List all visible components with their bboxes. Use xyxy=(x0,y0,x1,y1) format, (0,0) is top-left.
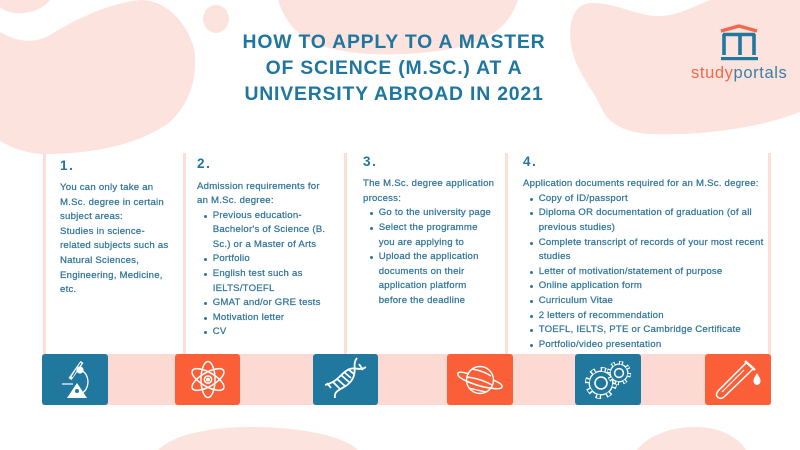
step 1 text: Natural Sciences, xyxy=(60,255,139,266)
step 2 text: GMAT and/or GRE tests xyxy=(213,297,321,308)
title: UNIVERSITY ABROAD IN 2021 xyxy=(244,83,544,105)
step 1 text xyxy=(60,182,168,295)
step 4 text: Portfolio/video presentation xyxy=(539,339,661,350)
step 4 text: 2 letters of recommendation xyxy=(539,310,664,321)
logo: studyportals xyxy=(691,24,787,82)
step 4 text: Curriculum Vitae xyxy=(539,295,613,306)
step 3 text: documents on their xyxy=(379,266,464,277)
step 4 number: 4. xyxy=(523,154,537,169)
step 3 text: Upload the application xyxy=(379,251,479,262)
step 4 text: TOEFL, IELTS, PTE or Cambridge Certificate xyxy=(539,324,741,335)
icon: microscope xyxy=(42,354,108,405)
step 4 text xyxy=(522,178,764,350)
icon: DNA helix xyxy=(313,354,378,405)
step 3 text: Select the programme xyxy=(379,222,478,233)
icon: test tube xyxy=(705,354,771,405)
step 2 text: IELTS/TOEFL xyxy=(213,283,275,294)
step 3 text xyxy=(363,178,494,306)
step 3 number: 3. xyxy=(363,154,377,169)
step 1 text: etc. xyxy=(60,284,76,295)
icon: planet xyxy=(447,354,513,405)
step 2 text: Motivation letter xyxy=(213,312,284,323)
title xyxy=(243,31,545,105)
step 1 text: subject areas: xyxy=(60,211,123,222)
step 1 number: 1. xyxy=(60,158,74,173)
step 2 text: CV xyxy=(213,326,226,337)
step 2 number: 2. xyxy=(197,156,211,171)
step 3 text: process: xyxy=(363,193,401,204)
step 4 text: previous studies) xyxy=(539,222,615,233)
step 1 text: Studies in science- xyxy=(60,226,145,237)
step 4 text: studies xyxy=(539,251,571,262)
step 4 text: Diploma OR documentation of graduation (of all xyxy=(539,207,752,218)
icon: gears xyxy=(575,354,641,405)
step 3 text: application platform xyxy=(379,280,466,291)
step 1 text: related subjects such as xyxy=(60,240,168,251)
step 3 text: you are applying to xyxy=(379,237,464,248)
step 4 text: Letter of motivation/statement of purpose xyxy=(539,266,723,277)
logo: studyportals: studyportals xyxy=(691,64,787,82)
step 2 text: English test such as xyxy=(213,268,303,279)
step 4 text: Online application form xyxy=(539,280,642,291)
step 4 text: Copy of ID/passport xyxy=(539,193,628,204)
icon: atom xyxy=(175,354,240,405)
step 2 text: Admission requirements for xyxy=(197,180,320,192)
title: OF SCIENCE (M.SC.) AT A xyxy=(266,57,522,79)
timeline strip xyxy=(42,354,771,405)
step 1 text: M.Sc. degree in certain xyxy=(60,197,164,208)
title: HOW TO APPLY TO A MASTER xyxy=(243,31,545,53)
step 4 text: Complete transcript of records of your most recent xyxy=(539,237,763,248)
step 2 text: Portfolio xyxy=(213,253,250,264)
step 3 text: Go to the university page xyxy=(379,207,491,218)
step 3 text: The M.Sc. degree application xyxy=(363,178,494,189)
step 2 text: Sc.) or a Master of Arts xyxy=(213,239,316,250)
step 2 text: an M.Sc. degree: xyxy=(197,195,274,206)
step 2 text: Bachelor's of Science (B. xyxy=(213,224,325,235)
step 2 text xyxy=(196,180,325,337)
step 3 text: before the deadline xyxy=(379,295,465,306)
step 4 text: Application documents required for an M.Sc. degree: xyxy=(523,178,759,189)
step 1 text: You can only take an xyxy=(60,182,153,193)
step 1 text: Engineering, Medicine, xyxy=(60,270,163,281)
step 2 text: Previous education- xyxy=(213,210,302,221)
